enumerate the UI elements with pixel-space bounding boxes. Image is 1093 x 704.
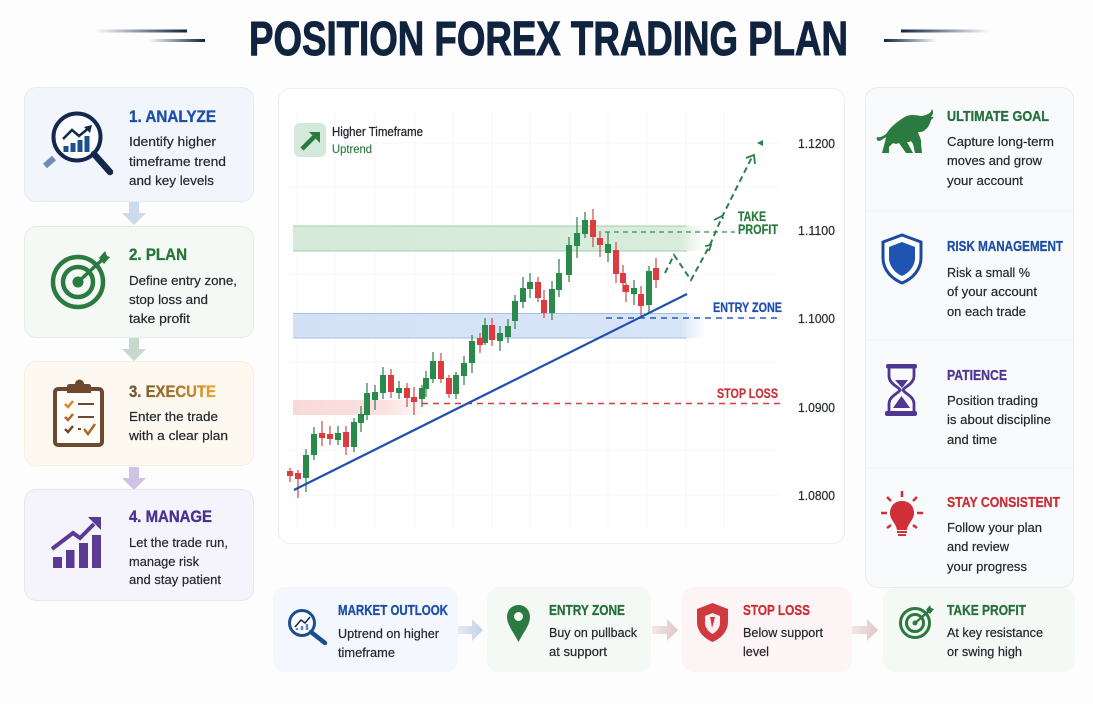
text block: with a clear plan [128,428,228,443]
legend: higher timeframe uptrend: Higher Timeframe [332,125,423,139]
icon: magnifier with chart [45,114,110,172]
text block: moves and grow [947,153,1043,168]
price axis: 1.1000 [798,311,835,326]
heading: RISK MANAGEMENT [947,238,1063,255]
heading: 2. PLAN [129,246,187,264]
heading: STAY CONSISTENT [947,494,1060,511]
panel: principles [866,88,1074,588]
text block: Enter the trade [129,409,218,424]
arrow: stop to profit [852,619,878,641]
text block [549,625,637,659]
text block [947,393,1051,447]
text block: timeframe trend [129,154,226,169]
arrow: step 2 to 3 [122,338,146,361]
text block [947,625,1043,659]
panel: step 4 manage [24,490,254,600]
arrow: step 3 to 4 [122,467,146,490]
icon: shield [883,235,921,283]
icon: target with arrow [53,251,110,307]
text block: Buy on pullback [549,625,637,640]
icon: hourglass [885,364,917,416]
text block [947,265,1037,319]
section: risk management [883,235,1063,319]
level line: stop loss [422,402,782,404]
trend line [294,294,687,490]
heading: TAKE PROFIT [947,603,1026,619]
text block: Define entry zone, [129,273,237,288]
text block: Position trading [947,393,1038,408]
text block: timeframe [338,645,395,660]
text block: is about discipline [947,412,1051,427]
price axis [798,136,835,503]
price axis: 1.1200 [798,136,835,151]
card: market outlook [273,587,458,672]
text block: manage risk [129,554,199,569]
label: entry zone: ENTRY ZONE [713,300,782,315]
text block: of your account [947,284,1037,299]
icon: light bulb [881,491,923,535]
text block: and stay patient [129,572,221,587]
section: ultimate goal [877,108,1054,188]
projected path arrow [665,140,763,280]
label: take profit [738,209,779,237]
text block: and time [947,432,997,447]
text block: stop loss and [129,292,208,307]
level line: take profit [605,231,735,233]
title: POSITION FOREX TRADING PLAN [249,13,848,66]
panel: step 1 analyze [24,88,254,202]
heading: 4. MANAGE [129,508,212,526]
text block: Uptrend on higher [338,626,440,641]
price axis: 1.0800 [798,488,835,503]
text block: Below support [743,625,823,640]
legend: higher timeframe uptrend: Uptrend [332,142,372,156]
text block: at support [549,644,607,659]
stop loss band [293,400,428,415]
text block: level [743,644,769,659]
take profit zone [293,226,705,251]
text block [947,520,1042,574]
label: take profit: TAKE [738,209,766,224]
text block: your progress [947,559,1027,574]
section: patience [885,364,1051,447]
arrow: outlook to entry [458,619,483,641]
text block [129,273,237,326]
text block [743,625,823,659]
label: take profit: PROFIT [738,222,779,237]
panel: price chart [278,88,844,544]
heading: ULTIMATE GOAL [947,108,1049,125]
text block: on each trade [947,304,1026,319]
text block: At key resistance [947,625,1043,640]
section: stay consistent [881,491,1060,574]
text block: or swing high [947,644,1022,659]
text block: Capture long-term [947,134,1054,149]
heading: MARKET OUTLOOK [338,603,448,619]
heading: 1. ANALYZE [129,108,216,126]
icon: clipboard checklist [55,380,102,445]
card: stop loss [682,587,852,672]
arrow: entry to stop [652,619,678,641]
text block: take profit [129,311,190,326]
price axis: 1.0900 [798,400,835,415]
text block [129,134,226,188]
legend: higher timeframe uptrend [294,123,423,157]
panel: step 3 execute [24,362,254,466]
text block: Risk a small % [947,265,1030,280]
icon: bull [877,109,934,153]
heading: STOP LOSS [743,603,810,619]
icon: magnifier [290,610,325,643]
heading: PATIENCE [947,367,1007,384]
text block [128,409,228,443]
text block [129,535,228,587]
panel: step 2 plan [24,226,254,338]
text block [338,626,440,660]
text block [947,134,1054,188]
text block: and review [947,539,1010,554]
heading: 3. EXECUTE [129,383,216,401]
icon: map pin [507,605,530,642]
icon: target [900,605,934,638]
text block: your account [947,173,1023,188]
card: entry zone [487,587,651,672]
entry zone band [293,313,705,338]
price axis: 1.1100 [798,223,835,238]
card: take profit [883,588,1075,672]
text block: Follow your plan [947,520,1042,535]
text block: and key levels [129,173,215,188]
label: stop loss: STOP LOSS [717,386,778,401]
heading: ENTRY ZONE [549,603,625,619]
icon: red shield [697,603,728,642]
arrow: step 1 to 2 [122,202,146,225]
text block: Let the trade run, [129,535,228,550]
level line: entry [606,317,782,319]
candlesticks [290,209,656,498]
text block: Identify higher [129,134,217,149]
icon: rising bars [52,517,101,568]
